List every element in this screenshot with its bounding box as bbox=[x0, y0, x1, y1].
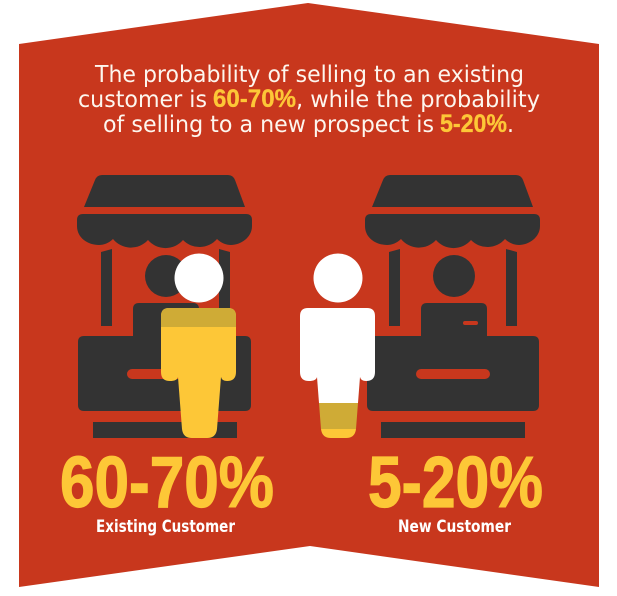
icon: existing customer figure bbox=[161, 254, 236, 438]
heading: . bbox=[507, 110, 514, 138]
heading bbox=[78, 60, 540, 138]
icon: new customer figure bbox=[300, 254, 375, 438]
heading: customer is bbox=[78, 85, 207, 113]
heading: 5-20% bbox=[440, 110, 507, 138]
heading: 60-70% bbox=[213, 85, 296, 113]
stat: existing customer: Existing Customer bbox=[96, 517, 236, 536]
stat: new customer: New Customer bbox=[398, 517, 512, 536]
heading: The probability of selling to an existing bbox=[94, 60, 524, 88]
stat: new customer: 5-20% bbox=[368, 443, 543, 523]
icon: left market stall bbox=[77, 175, 252, 438]
icon: right market stall bbox=[365, 175, 540, 438]
stat: existing customer: 60-70% bbox=[60, 443, 274, 523]
heading: of selling to a new prospect is bbox=[103, 110, 434, 138]
heading: , while the probability bbox=[296, 85, 540, 113]
